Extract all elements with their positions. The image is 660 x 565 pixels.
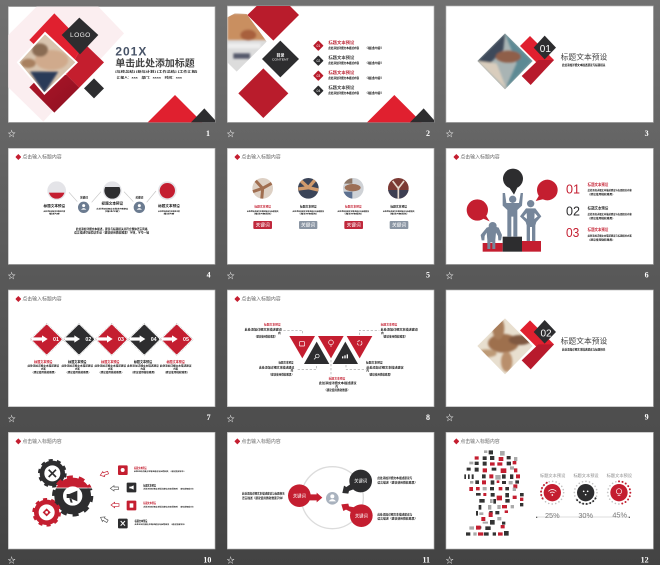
numbered item 03 — [566, 225, 632, 241]
slide heading: 点击输入标题内容 — [241, 154, 281, 161]
step 4 diamond — [128, 323, 161, 356]
arrow 2 — [110, 486, 118, 491]
description lower right: 语言描述（建议使用微软雅黑） — [377, 517, 417, 521]
cover year: 201X — [115, 45, 147, 59]
column text 3 — [337, 204, 369, 216]
section subtitle: 此处添加详细文本描述建议与标题相关 — [562, 347, 606, 351]
percent values: 45% — [612, 510, 627, 519]
slide heading: 点击输入标题内容 — [22, 296, 62, 303]
cover title: 单击此处添加标题 — [115, 58, 195, 70]
contents item 1: 01 — [316, 44, 320, 48]
slide heading: 点击输入标题内容 — [241, 438, 281, 445]
footer star: ☆ — [8, 556, 16, 565]
callout: lower right: （建议使用微软雅黑） — [367, 372, 393, 376]
step 2 text: （建议使用微软雅黑） — [65, 370, 91, 374]
contents item 2: 标题文本预设 — [328, 54, 354, 60]
speech bubble: dark top — [503, 169, 523, 195]
footer star: ☆ — [446, 556, 454, 565]
contents diamond: 目录 — [276, 52, 284, 58]
item 2: 标题文本预设 — [143, 484, 156, 488]
keyword circle dark — [349, 470, 372, 492]
bottom description: 此处添加详细文本描述，建议与标题相关并符合整体语言风格 — [76, 227, 148, 231]
circle gauge: full — [158, 181, 177, 200]
contents item 4: 04 — [316, 89, 320, 93]
photo diamond: stacked hands — [477, 317, 534, 375]
speech bubble: red left — [467, 199, 490, 221]
step 1 diamond: 01 — [53, 337, 59, 343]
item 1 — [118, 465, 186, 475]
step 4 text: 内容 — [141, 366, 146, 370]
slide heading: 点击输入标题内容 — [22, 438, 62, 445]
callout: top left — [245, 323, 282, 339]
description lower right — [377, 512, 417, 521]
callout: lower left — [259, 361, 295, 376]
step 3 text: 内容 — [108, 366, 113, 370]
step 2 text: 标题文本预设 — [68, 359, 87, 364]
stat 1: 25%: 标题文本预设 — [540, 472, 565, 478]
callout: top right: （建议使用微软雅黑） — [381, 335, 407, 339]
circle captions: 标题文本预设 — [101, 201, 124, 206]
pink diamond backdrop — [8, 7, 124, 122]
gear: megaphone two-tone — [54, 477, 91, 515]
stat 2: 30% — [570, 472, 601, 508]
description left — [242, 492, 285, 500]
circle captions: 标题文本预设 — [43, 203, 66, 208]
slide 3: section 01 — [446, 6, 653, 139]
callout: lower left: 标题文本预设 — [278, 361, 294, 365]
column text 1: （描述内容相关） — [252, 212, 273, 216]
step 1 text — [27, 359, 60, 374]
slide 2: contents — [227, 6, 434, 139]
description upper right: 语言描述（建议使用微软雅黑） — [377, 481, 417, 485]
numbered item 03: 标题文本预设 — [588, 226, 608, 232]
step 5 diamond: 05 — [183, 337, 189, 343]
logo diamond: LOGO — [70, 32, 91, 39]
stat 3: 45% — [607, 472, 632, 504]
page number: 5 — [426, 271, 430, 280]
column text 2 — [292, 204, 324, 216]
node labels: 关键词 — [135, 196, 144, 200]
contents item 3: 标题文本预设 — [328, 69, 354, 75]
keyword circle right: 关键词 — [355, 512, 368, 519]
red chevron — [520, 36, 554, 85]
step 5 text: 标题文本预设 — [166, 359, 185, 364]
column text 1 — [247, 204, 279, 216]
arrow 3 — [111, 502, 119, 508]
callout: lower left: （建议使用微软雅黑） — [269, 372, 294, 376]
numbered item 02 — [566, 203, 632, 220]
item 4 — [118, 519, 186, 528]
step 4 text — [127, 359, 160, 374]
footer star: ☆ — [446, 130, 454, 139]
numbered item 01: 01 — [566, 182, 580, 197]
contents diamond: CONTENT — [272, 58, 289, 62]
bottom description: 语言描述尽量简洁生动（建议使用微软雅黑）字体，字号一致 — [74, 231, 150, 235]
keyword button 2: 关键词 — [301, 222, 315, 229]
slide 10: gears — [8, 432, 215, 565]
slide 6: podium — [446, 148, 653, 280]
contents item 1: 此处添加详细文本描述内容 — [328, 46, 359, 50]
step 2 text: 内容 — [75, 366, 80, 370]
circle captions: 描述内容 — [49, 211, 60, 215]
callout: top left: 此处添加详细文本描述建议 — [245, 328, 282, 332]
step 2 text: 此处添加详细文本描述建议 — [61, 363, 94, 367]
contents item 1 — [314, 39, 384, 50]
numbered item 01: 此处添加详细文本描述建议与标题相关内容 — [588, 188, 632, 192]
page number: 12 — [641, 555, 649, 564]
circle captions: 此处添加详细文本描述内容建议 — [96, 207, 128, 211]
footer star: ☆ — [446, 271, 454, 280]
numbered item 02: 标题文本预设 — [588, 205, 608, 211]
cover tags: [年终总结] [新年计划] [工作总结] [工作汇报] — [115, 69, 198, 73]
page number: 11 — [422, 555, 430, 564]
numbered item 02: 02 — [566, 203, 580, 218]
contents item 3: 03 — [316, 74, 320, 78]
slide heading: 点击输入标题内容 — [22, 154, 62, 161]
contents item 2 — [314, 54, 384, 65]
column text 3: 此处添加详细文本描述建议与标题相关 — [337, 209, 369, 213]
description lower right: 此处添加详细文本描述建议与 — [377, 512, 413, 516]
step 5 diamond — [160, 323, 193, 356]
circle gauge: low — [47, 182, 66, 200]
center person — [326, 492, 339, 505]
triangle: chart — [333, 342, 358, 364]
column text 1: 标题文本预设 — [254, 204, 271, 208]
triangle: bulb — [318, 336, 344, 358]
numbered item 03: 03 — [566, 225, 579, 240]
podium — [483, 237, 541, 252]
stat 2: 30%: 标题文本预设 — [573, 472, 599, 478]
contents item 3 — [314, 69, 384, 80]
step 3 diamond: 03 — [118, 337, 124, 343]
step 5 text: 内容 — [173, 366, 179, 370]
step 1 diamond — [30, 323, 63, 356]
page number: 6 — [645, 271, 649, 280]
contents item 3: （描述内容） — [365, 76, 384, 80]
figure: hands on hips — [520, 200, 541, 241]
large ring — [301, 467, 363, 529]
column text 3: 标题文本预设 — [345, 204, 362, 208]
callout: lower right: 此处添加详细文本描述建议 — [366, 365, 404, 369]
step 5 text — [160, 359, 192, 374]
photo diamond: handshake — [477, 33, 534, 90]
contents item 4: 标题文本预设 — [328, 84, 354, 90]
triangle: search — [304, 342, 329, 364]
callout: bottom center: 此处添加详细文本描述建议 — [319, 381, 357, 385]
footer star: ☆ — [227, 130, 235, 139]
contents item 4 — [314, 84, 384, 95]
keyword circle left: 关键词 — [293, 492, 306, 499]
keyword circle dark: 关键词 — [354, 478, 367, 485]
contents diamond — [262, 41, 299, 77]
column text 2: 标题文本预设 — [300, 204, 317, 208]
keyword button 4 — [390, 221, 408, 229]
photo diamond: stacked hands — [17, 32, 80, 95]
item 1: 标题文本预设 — [134, 466, 147, 470]
slide 1: cover — [8, 7, 215, 139]
callout: top left: 内 — [278, 331, 281, 335]
column text 1: 此处添加详细文本描述建议与标题相关 — [247, 209, 279, 213]
step 5 text: （建议使用微软雅黑） — [163, 370, 189, 374]
circle captions: 标题文本预设 — [158, 203, 180, 208]
node labels: 关键词 — [80, 196, 88, 200]
slide 4: three circles — [8, 148, 215, 280]
description upper right: 此处添加详细文本描述建议与 — [377, 476, 413, 480]
callout: lower right — [366, 361, 404, 376]
step 1 text: 标题文本预设 — [34, 359, 53, 364]
keyword button 1 — [253, 221, 272, 229]
section subtitle: 此处添加详细文本描述建议与标题相关 — [562, 63, 606, 67]
keyword circle right — [350, 504, 373, 527]
gear: target red — [34, 500, 59, 525]
callout: top right: 此处添加详细文本描述建议 — [381, 328, 418, 332]
footer star: ☆ — [8, 271, 16, 280]
percent values: 30% — [578, 511, 593, 520]
connector lines — [69, 191, 156, 202]
photo circle 3 — [343, 178, 364, 199]
corner triangles — [367, 95, 434, 122]
column text 2: （描述内容相关） — [298, 212, 319, 216]
numbered item 01: （建议使用微软雅黑） — [588, 192, 615, 196]
page number: 3 — [645, 129, 649, 138]
lower arrow — [341, 504, 356, 512]
page number: 2 — [426, 129, 430, 138]
item 3: 标题文本预设 — [143, 501, 156, 505]
contents item 2: （描述内容） — [365, 61, 384, 65]
column text 4: 标题文本预设 — [390, 204, 407, 208]
section title: 标题文本预设 — [561, 336, 608, 346]
contents item 1: 标题文本预设 — [328, 39, 354, 45]
keyword button 2 — [299, 221, 317, 229]
section number diamond: 02 — [540, 328, 552, 339]
contents item 2: 此处添加详细文本描述内容 — [328, 61, 359, 65]
bottom description — [74, 227, 150, 235]
slide heading: 点击输入标题内容 — [460, 154, 500, 161]
numbered item 03: 此处添加详细文本描述建议与标题相关内容 — [588, 233, 632, 237]
step 2 diamond — [62, 323, 96, 356]
item 3: 此处添加详细文本描述建议与标题相关 （建议使用字体） — [143, 505, 195, 508]
stat 1: 25% — [537, 472, 568, 508]
circle captions: （描述内容） — [103, 209, 121, 213]
step 3 text: 此处添加详细文本描述建议 — [94, 363, 127, 367]
description left: 此处添加详细文本描述建议与标题相关 — [242, 492, 285, 496]
person icon node 1 — [78, 202, 89, 213]
left arrow — [308, 493, 322, 502]
circle gauge: mid — [102, 181, 122, 200]
contents item 3: 此处添加详细文本描述内容 — [328, 76, 359, 80]
triangle: photo — [289, 336, 315, 358]
keyword button 1: 关键词 — [256, 222, 270, 229]
section title: 标题文本预设 — [561, 51, 608, 61]
footer star: ☆ — [446, 413, 454, 422]
keyword button 3 — [344, 221, 363, 229]
slide 11: circular relation — [227, 432, 434, 565]
photo circle 4 — [388, 178, 409, 199]
circle captions — [43, 201, 180, 215]
percent values: 25% — [545, 511, 560, 520]
dashed leaders — [283, 330, 379, 377]
slide heading: 点击输入标题内容 — [460, 438, 500, 445]
footer star: ☆ — [227, 415, 235, 424]
step 1 text: （建议使用微软雅黑） — [31, 370, 57, 374]
photo circle 2 — [297, 177, 319, 199]
numbered item 01 — [566, 181, 632, 197]
step 3 diamond — [95, 323, 128, 356]
item 2 — [127, 483, 195, 492]
footer star: ☆ — [8, 130, 16, 139]
page number: 9 — [645, 413, 649, 422]
page number: 4 — [207, 271, 211, 280]
page number: 8 — [426, 413, 430, 422]
page number: 1 — [206, 129, 210, 138]
step 4 text: （建议使用微软雅黑） — [131, 370, 157, 374]
callout: lower right: 标题文本预设 — [366, 361, 383, 365]
node labels — [80, 196, 144, 200]
circle captions: 此处添加详细文本描述内容 — [158, 209, 180, 213]
contents item 2: 02 — [316, 59, 320, 63]
stat 3: 45%: 标题文本预设 — [607, 472, 632, 478]
figure: crouching — [481, 222, 502, 249]
page number: 7 — [207, 413, 211, 422]
step 1 text: 此处添加详细文本描述建议 — [27, 363, 60, 367]
description upper right — [377, 476, 417, 485]
footer star: ☆ — [8, 415, 16, 424]
small dark diamond — [84, 78, 104, 98]
keyword circle left — [288, 484, 311, 507]
item 3 — [127, 501, 195, 510]
column text 4: （描述内容相关） — [388, 212, 409, 216]
head silhouette made of icons — [464, 450, 524, 536]
callout: lower right: 内 — [366, 369, 369, 373]
callout: top right: 内 — [381, 331, 384, 335]
step 2 text — [61, 359, 94, 374]
callout: top right — [381, 323, 418, 339]
person icon node 2 — [134, 202, 145, 213]
top red diamond — [247, 6, 299, 41]
callout: top left: 标题文本预设 — [264, 323, 281, 327]
item 1: 此处添加详细文本描述建议与标题相关 （建议使用字体） — [134, 470, 186, 473]
lower red diamond — [238, 68, 288, 118]
callout: lower left: 此处添加详细文本描述建议 — [259, 365, 295, 369]
red chevron — [520, 320, 554, 369]
slide heading: 点击输入标题内容 — [241, 296, 281, 303]
section number diamond — [534, 320, 556, 344]
callout: bottom center: 内 — [335, 384, 338, 388]
slide 12: head of icons — [446, 432, 653, 565]
section number diamond — [534, 36, 556, 59]
cover info line: 汇报人：xxx 部门：xxxx 时间：xxx — [117, 75, 183, 79]
column text 4 — [383, 204, 415, 216]
footer star: ☆ — [227, 556, 235, 565]
column text 4: 此处添加详细文本描述建议与标题相关 — [383, 209, 415, 213]
speech bubble: red right — [536, 180, 558, 201]
step 3 text: 标题文本预设 — [101, 359, 120, 364]
step 5 text: 此处添加详细文本描述建议 — [160, 363, 192, 367]
step 4 text: 标题文本预设 — [134, 359, 152, 364]
percent values — [545, 510, 627, 520]
item 2: 此处添加详细文本描述建议与标题相关 （建议使用字体） — [143, 488, 195, 491]
callout: bottom center: 标题文本预设 — [329, 376, 346, 380]
percent baseline — [536, 517, 630, 518]
arrow 4 — [99, 515, 109, 524]
step 3 text — [94, 359, 127, 374]
step 1 text: 内容 — [41, 366, 46, 370]
photo circle 1 — [252, 178, 273, 199]
step 4 text: 此处添加详细文本描述建议 — [127, 363, 160, 367]
numbered item 02: 此处添加详细文本描述建议与标题相关内容 — [588, 212, 632, 216]
footer star: ☆ — [227, 271, 235, 280]
step 2 diamond: 02 — [85, 337, 91, 343]
slide 5: four photo circles — [227, 148, 434, 280]
callout: lower left: 内 — [291, 369, 294, 373]
column text 3: （描述内容相关） — [343, 212, 364, 216]
step 4 diamond: 04 — [151, 337, 157, 343]
figure: winner arms up — [503, 193, 523, 237]
callout: bottom center — [319, 376, 357, 392]
item 4: 此处添加详细文本描述建议与标题相关 （建议使用字体） — [135, 523, 186, 526]
section number diamond: 01 — [540, 44, 551, 55]
numbered item 02: （建议使用微软雅黑） — [588, 216, 615, 220]
callout: top left: （建议使用微软雅黑） — [254, 335, 277, 339]
column text 2: 此处添加详细文本描述建议与标题相关 — [292, 209, 324, 213]
callout: bottom center: （建议使用微软雅黑） — [324, 388, 350, 392]
logo diamond — [62, 18, 98, 54]
numbered item 01: 标题文本预设 — [588, 181, 608, 187]
triangle: refresh — [347, 336, 372, 358]
numbered item 03: （建议使用微软雅黑） — [588, 237, 615, 241]
keyword button 4: 关键词 — [392, 222, 406, 229]
circle captions: 此处添加详细文本描述内容 — [43, 209, 65, 213]
circle captions: 描述内容 — [164, 211, 174, 215]
photo diamond: desk — [227, 13, 267, 73]
slide 9: section 02 — [446, 290, 653, 422]
keyword button 3: 关键词 — [347, 222, 361, 229]
page number: 10 — [203, 555, 211, 564]
corner triangles — [148, 95, 215, 122]
arrow 1 — [99, 470, 109, 478]
item 4: 标题文本预设 — [135, 519, 148, 523]
step 3 text: （建议使用微软雅黑） — [98, 370, 124, 374]
contents item 4: （描述内容） — [365, 91, 384, 95]
slide 7: five step diamonds — [8, 290, 215, 424]
contents item 1: （描述内容） — [365, 46, 384, 50]
red diamond cluster — [29, 13, 104, 113]
upper arrow — [342, 483, 356, 494]
gear: tools dark — [40, 461, 65, 486]
slide 8: triangles — [227, 290, 434, 424]
callout: top right: 标题文本预设 — [381, 323, 398, 327]
contents item 4: 此处添加详细文本描述内容 — [328, 91, 359, 95]
description left: 语言描述（建议使用微软雅黑字体） — [242, 496, 285, 500]
